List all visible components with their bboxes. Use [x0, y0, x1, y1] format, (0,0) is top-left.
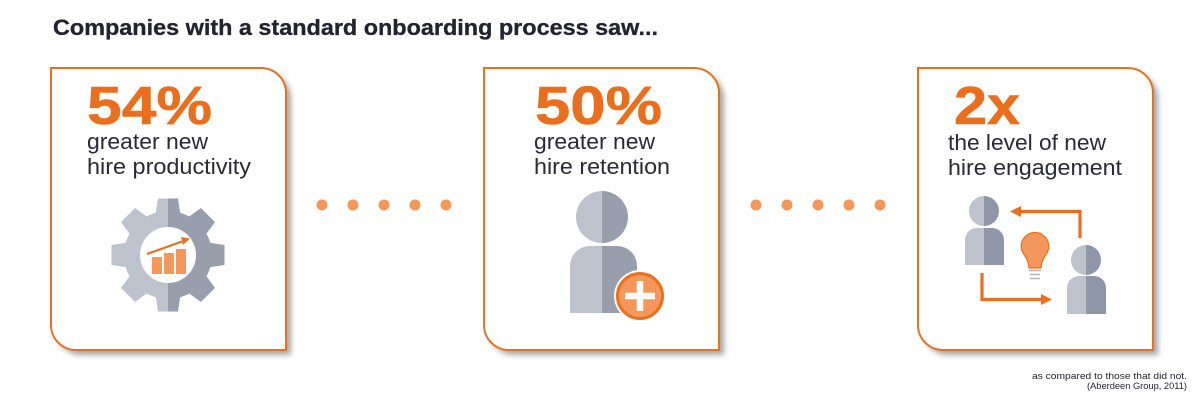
panel: productivity — [51, 68, 291, 355]
icon: person with plus — [570, 191, 666, 322]
footnote: as compared to those that did not. — [1032, 371, 1187, 382]
stat: 50%: 50% — [535, 76, 662, 136]
connector dots 1 — [316, 200, 452, 210]
panel: engagement — [918, 68, 1158, 355]
stat: 2x: 2x — [954, 76, 1020, 136]
stat: 54%: 54% — [87, 76, 212, 136]
person left — [965, 196, 1004, 265]
text: engagement label: the level of new — [948, 130, 1106, 155]
icon: gear with growth chart — [112, 198, 224, 312]
connector dots 2 — [750, 200, 886, 210]
panel: retention — [484, 68, 724, 355]
arrow: right person to left person — [1010, 206, 1080, 238]
title: Companies with a standard onboarding process saw... — [53, 15, 658, 40]
text: retention label: greater new — [534, 129, 655, 154]
text: productivity label: greater new — [87, 129, 208, 154]
text: retention label line 2: hire retention — [534, 154, 670, 179]
person right — [1067, 245, 1106, 314]
icon: light bulb — [1021, 232, 1049, 278]
icon: two people sharing an idea — [965, 196, 1106, 314]
footnote: (Aberdeen Group, 2011) — [1087, 381, 1187, 392]
arrow: left person to right person — [982, 273, 1052, 305]
footnote — [1032, 371, 1187, 392]
text: engagement label line 2: hire engagement — [948, 155, 1122, 180]
text: productivity label line 2: hire productivity — [87, 154, 251, 179]
